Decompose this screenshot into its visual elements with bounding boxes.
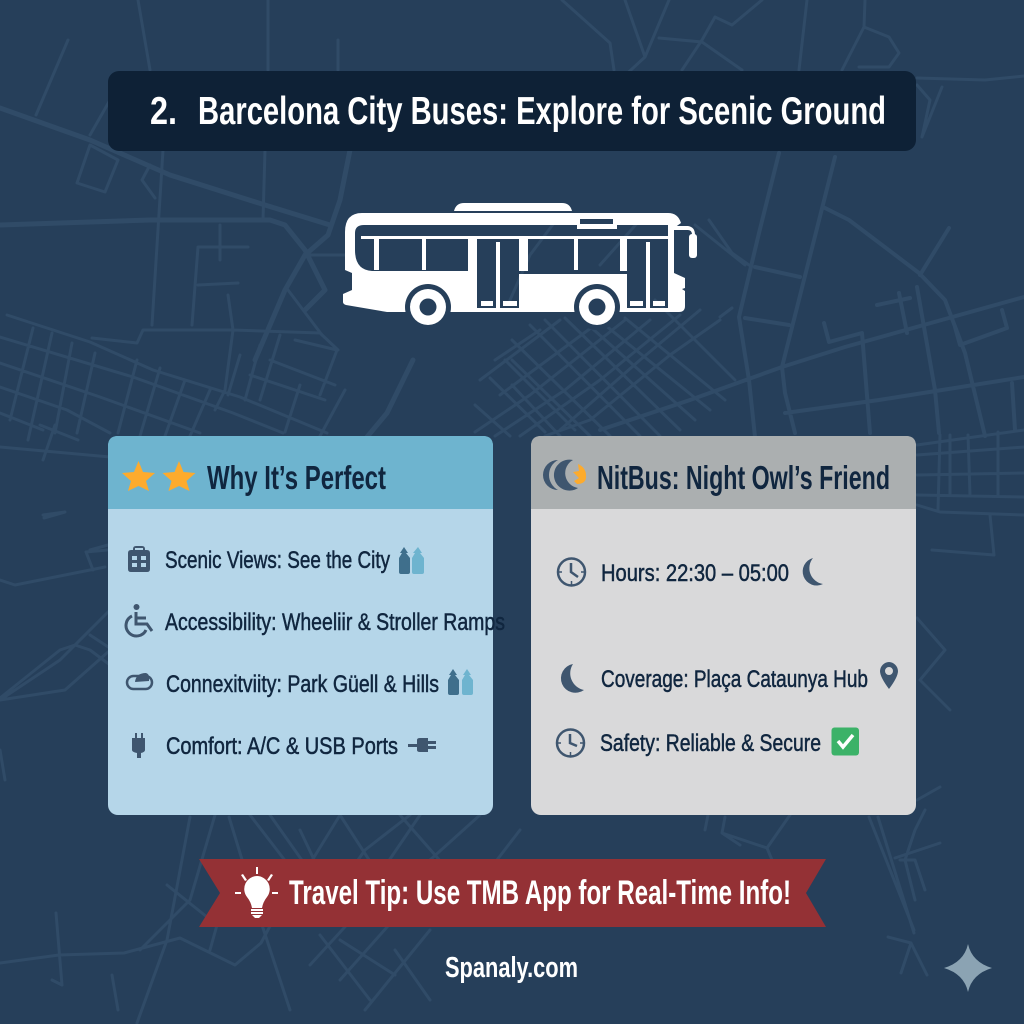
icon: clock: [557, 730, 584, 756]
text: hours: Hours: 22:30 – 05:00: [601, 560, 789, 587]
panel: why it's perfect: [108, 436, 505, 815]
title bar: [108, 71, 916, 151]
heading: why it's perfect: Why It’s Perfect: [207, 459, 386, 496]
icon: plug horizontal: [408, 738, 436, 752]
text: coverage: Coverage: Plaça Cataunya Hub: [601, 666, 868, 693]
icon: clock: [558, 558, 585, 586]
icon: light bulb: [235, 867, 278, 918]
icon: check: [832, 728, 859, 756]
icon: wheelchair: [126, 604, 152, 636]
text: comfort: Comfort: A/C & USB Ports: [166, 733, 398, 760]
heading: nitbus: NitBus: Night Owl’s Friend: [597, 459, 890, 496]
text: scenic views: Scenic Views: See the City: [165, 547, 390, 574]
icon: suitcase: [128, 546, 150, 572]
icon: bottles: [399, 547, 424, 574]
icon: sparkle: [944, 944, 992, 992]
tip text: Travel Tip: Use TMB App for Real-Time Info!: [289, 874, 791, 912]
icon: connection: [127, 673, 152, 689]
icon: map pin: [880, 662, 898, 689]
text: connectivity: Connexitviity: Park Güell & Hills: [166, 671, 439, 698]
icon: moon: [561, 664, 584, 693]
title number: 2.: [150, 90, 177, 133]
icon: two stars: [122, 461, 196, 491]
banner: travel tip: [199, 859, 826, 927]
text: safety: Safety: Reliable & Secure: [600, 730, 821, 757]
icon: bus: [343, 203, 697, 330]
panel: nitbus: [531, 436, 916, 815]
text: accessibility: Accessibility: Wheeliir & Stroller Ramps: [165, 609, 505, 636]
footer: site name: Spanaly.com: [445, 952, 578, 984]
icon: plug: [132, 733, 145, 758]
icon: bottles: [448, 669, 473, 695]
icon: moon: [803, 558, 823, 586]
icon: moons: [543, 460, 586, 491]
